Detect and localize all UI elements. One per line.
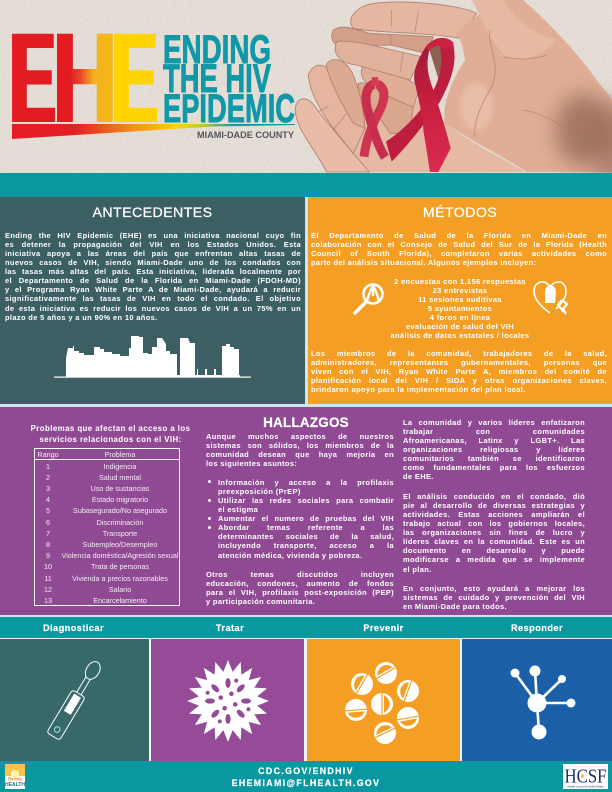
text: conclusion paragraph: sistemas de cuidado y prevención del VIH bbox=[403, 593, 585, 602]
heading: hallazgos: HALLAZGOS bbox=[263, 415, 349, 430]
text: hallazgos intro bbox=[206, 432, 394, 468]
text: hallazgos closing: y participación comunitaria. bbox=[206, 597, 315, 606]
text: metodos intro: colaboración con el Consejo de Salud del Sur de la Florida (Health bbox=[311, 240, 607, 249]
logo: florida health: florida bbox=[8, 776, 22, 782]
table rows: Encarcelamiento bbox=[93, 596, 147, 605]
icon: network bbox=[510, 666, 576, 740]
header photo bbox=[0, 0, 612, 173]
label: diagnosticar: Diagnosticar bbox=[43, 623, 104, 633]
text: hallazgos intro: los siguientes asuntos: bbox=[206, 459, 297, 468]
logo title: Ending the HIV Epidemic: ENDING bbox=[163, 28, 271, 72]
icon: test swab bbox=[47, 658, 104, 740]
table header: Problema bbox=[105, 450, 135, 459]
teal band bbox=[0, 173, 612, 197]
text: metodos intro: parte del análisis situacional. Algunos ejemplos incluyen: bbox=[311, 258, 536, 267]
list: hallazgos bullets: Información y acceso a la profilaxis bbox=[218, 478, 394, 486]
table: problems ranking bbox=[34, 448, 180, 606]
fabric background bbox=[0, 0, 612, 173]
footer contact text: CDC.GOV/ENDHIV bbox=[258, 766, 354, 776]
icon: city skyline bbox=[54, 336, 251, 378]
text: county analysis paragraph: líderes claves en la comunidad. Este es un bbox=[403, 537, 585, 546]
logo title: Ending the HIV Epidemic: EPIDEMIC bbox=[163, 87, 295, 131]
pillar label band bbox=[0, 617, 612, 792]
text: metodos closing bbox=[311, 348, 607, 394]
table rows: Violencia doméstica/Agresión sexual bbox=[62, 551, 178, 560]
text: county analysis paragraph bbox=[403, 492, 585, 574]
text: antecedentes: de esta iniciativa es reducir los nuevos casos de VIH a un 75% en un bbox=[5, 304, 301, 313]
list: hallazgos bullets: el estigma bbox=[218, 505, 258, 514]
list: metodos activities: 4 foros en línea bbox=[430, 313, 490, 322]
table rows: Trata de personas bbox=[91, 562, 149, 571]
table rows: 7 bbox=[46, 529, 50, 538]
table rows: 11 bbox=[44, 574, 52, 582]
list: hallazgos bullets: atención médica, vivienda y pobreza. bbox=[218, 551, 362, 560]
list: metodos activities: 2 encuestas con 1,156 respuestas bbox=[394, 276, 526, 286]
gradient swoosh bbox=[12, 124, 295, 139]
table heading bbox=[31, 424, 190, 444]
red ribbon large bbox=[386, 38, 455, 172]
table rows: Indigencia bbox=[104, 462, 136, 470]
text: metodos closing: Los miembros de la comunidad, trabajadores de la salud, bbox=[311, 348, 607, 358]
text: conclusion paragraph: En conjunto, esto ayudará a mejorar los bbox=[403, 584, 585, 592]
logo title: Ending the HIV Epidemic: THE HIV bbox=[163, 57, 271, 101]
county label: MIAMI-DADE COUNTY bbox=[197, 130, 295, 141]
list: metodos activities: análisis de datos estatales / locales bbox=[391, 331, 529, 340]
table rows: 2 bbox=[46, 473, 50, 482]
table rows: Salario bbox=[109, 585, 131, 594]
list: hallazgos bullets: preexposición (PrEP) bbox=[218, 487, 301, 496]
text: antecedentes bbox=[5, 230, 301, 322]
text: community paragraph: Afroamericanas, Latinx y LGBT+. Las bbox=[403, 436, 585, 445]
table rows: Uso de sustancias bbox=[91, 484, 149, 493]
table rows: 1 bbox=[46, 462, 50, 470]
EHE logo: E bbox=[10, 6, 55, 149]
list: hallazgos bullets: determinantes sociales de la salud, bbox=[218, 532, 394, 541]
text: community paragraph: como fundamentales para los esfuerzos bbox=[403, 463, 585, 472]
tile: prevenir bbox=[307, 639, 460, 761]
text: community paragraph: comunitarios también se identificaron bbox=[403, 454, 585, 463]
text: conclusion paragraph bbox=[403, 584, 585, 611]
hands holding ribbons bbox=[295, 0, 612, 190]
EHE logo: E bbox=[112, 6, 157, 149]
footer contact text: EHEMIAMI@FLHEALTH.GOV bbox=[232, 778, 380, 788]
table rows: 13 bbox=[44, 596, 52, 605]
label: prevenir: Prevenir bbox=[363, 623, 404, 633]
text: community paragraph: organizaciones religiosas y líderes bbox=[403, 445, 585, 454]
text: hallazgos closing: para el VIH, profilaxis post-exposición (PEP) bbox=[206, 588, 394, 597]
text: community paragraph bbox=[403, 418, 585, 481]
table heading: servicios relacionados con el VIH: bbox=[39, 435, 182, 444]
text: community paragraph: de EHE. bbox=[403, 472, 434, 481]
text: hallazgos intro: sistemas son sólidos, los miembros de la bbox=[206, 441, 394, 450]
icon: heart with ribbon bbox=[533, 281, 568, 315]
list: hallazgos bullets: Abordar temas referente a las bbox=[218, 523, 394, 532]
text: antecedentes: Ending the HIV Epidemic (EHE) es una iniciativa nacional cuyo fin bbox=[5, 230, 301, 240]
text: metodos intro: El Departamento de Salud de la Florida en Miami-Dade en bbox=[311, 230, 607, 240]
icon: virus bbox=[187, 660, 269, 742]
logo: florida health bbox=[5, 764, 25, 789]
label: responder: Responder bbox=[511, 623, 563, 633]
bullet markers bbox=[208, 480, 211, 529]
list: metodos activities: 11 sesiones auditivas bbox=[418, 295, 502, 304]
panel: antecedentes bbox=[0, 197, 305, 404]
panel: metodos bbox=[308, 197, 612, 404]
list: metodos activities: evaluación de salud del VIH bbox=[406, 322, 514, 331]
table rows: Transporte bbox=[103, 529, 137, 538]
right palm and thumb bbox=[444, 0, 612, 172]
table rows: 5 bbox=[46, 506, 50, 515]
table rows: 9 bbox=[46, 551, 50, 560]
label: tratar: Tratar bbox=[216, 623, 244, 633]
text: antecedentes: significativamente las tasas de VIH en todo el condado. El objetivo bbox=[5, 294, 301, 303]
footer contact text bbox=[232, 766, 380, 788]
list: metodos activities bbox=[390, 276, 529, 340]
tile: tratar bbox=[151, 639, 304, 761]
table heading: Problemas que afectan el acceso a los bbox=[31, 424, 190, 433]
table rows: 12 bbox=[44, 585, 52, 594]
text: hallazgos intro: Aunque muchos aspectos de nuestros bbox=[206, 432, 394, 440]
text: metodos closing: planificación local del VIH / SIDA y otras organizaciones claves, bbox=[311, 376, 607, 385]
text: metodos closing: brindaron apoyo para la implementación del plan local. bbox=[311, 385, 526, 394]
table rows: Estado migratorio bbox=[92, 495, 148, 504]
lower palm bbox=[353, 83, 525, 172]
pillar icons row bbox=[0, 638, 612, 761]
table rows: Vivienda a precios razonables bbox=[72, 574, 168, 582]
icon: magnifier bbox=[353, 283, 384, 315]
table rows: 8 bbox=[46, 540, 50, 549]
heading: antecedentes: ANTECEDENTES bbox=[93, 205, 212, 221]
tile: responder bbox=[462, 639, 612, 761]
list: hallazgos bullets: Utilizar las redes sociales para combatir bbox=[218, 496, 394, 505]
logo: florida health: HEALTH bbox=[5, 782, 25, 788]
text: antecedentes: es detener la propagación del VIH en los Estados Unidos. Esta bbox=[5, 240, 301, 249]
text: hallazgos closing: Otros temas discutidos incluyen bbox=[206, 570, 394, 578]
text: metodos intro bbox=[311, 230, 607, 267]
list: hallazgos bullets: Aumentar el numero de pruebas del VIH bbox=[218, 514, 394, 523]
text: county analysis paragraph: modificarse a medida que se implemente bbox=[403, 555, 585, 564]
table rows: 10 bbox=[44, 562, 52, 571]
panel: hallazgos bbox=[0, 407, 612, 615]
text: county analysis paragraph: las organizaciones sin fines de lucro y bbox=[403, 528, 585, 537]
text: hallazgos closing: educación, condones, aumento de fondos bbox=[206, 579, 394, 588]
table rows: Subempleo/Desempleo bbox=[83, 540, 157, 549]
logo title: Ending the HIV Epidemic bbox=[163, 28, 295, 131]
table rows: Salud mental bbox=[99, 473, 141, 482]
list: hallazgos bullets bbox=[218, 478, 394, 560]
text: county analysis paragraph: el plan. bbox=[403, 565, 432, 574]
icon: pills bbox=[344, 658, 422, 748]
text: county analysis paragraph: documento en desarrollo y puede bbox=[403, 546, 585, 555]
text: hallazgos closing bbox=[206, 570, 394, 606]
text: community paragraph: La comunidad y varios líderes enfatizaron bbox=[403, 418, 585, 426]
text: metodos closing: viven con el VIH, Ryan White Parte A, miembros del comité de bbox=[311, 367, 607, 376]
text: antecedentes: plazo de 5 años y a un 90% en 10 años. bbox=[5, 313, 158, 322]
text: antecedentes: el Departamento de Salud de la Florida en Miami-Dade (FDOH-MD) bbox=[5, 276, 301, 285]
text: metodos intro: Council of South Florida), completaron varias actividades como bbox=[311, 249, 607, 258]
table rows: Discriminación bbox=[97, 518, 143, 526]
text: county analysis paragraph: pie al desarrollo de diversas estrategias y bbox=[403, 501, 585, 510]
table header: Rango bbox=[37, 450, 59, 459]
list: metodos activities: 23 entrevistas bbox=[433, 286, 487, 295]
table rows: Subasegurado/No asegurado bbox=[73, 506, 167, 515]
text: antecedentes: iniciativa apoya a las áreas del país que enfrentan altas tasas de bbox=[5, 249, 301, 258]
list: hallazgos bullets: incluyendo transporte, acceso a la bbox=[218, 541, 394, 550]
red ribbon small bbox=[364, 82, 385, 157]
text: metodos closing: administradores, representantes gubernamentales, personas que bbox=[311, 358, 607, 367]
text: antecedentes: las tasas más altas del país. Esta iniciativa, liderada localmente por bbox=[5, 267, 301, 276]
list: metodos activities: 5 ayuntamientos bbox=[428, 304, 492, 313]
table rows: 6 bbox=[46, 518, 50, 526]
text: county analysis paragraph: El análisis conducido en el condado, dió bbox=[403, 492, 585, 500]
table rows: 4 bbox=[46, 495, 50, 504]
table rows: 3 bbox=[46, 484, 50, 493]
text: county analysis paragraph: trabajo actual con los gobiernos locales, bbox=[403, 519, 585, 528]
EHE logo bbox=[10, 6, 157, 150]
table header bbox=[35, 449, 179, 460]
text: hallazgos intro: comunidad desean que haya mejoría en bbox=[206, 450, 394, 459]
heading: metodos: MÉTODOS bbox=[423, 205, 497, 221]
text: antecedentes: nuevos casos de VIH, siendo Miami-Dade uno de los condados con bbox=[5, 258, 301, 267]
EHE logo: H bbox=[52, 7, 117, 150]
text: county analysis paragraph: actividades. Estas acciones ampliarán el bbox=[403, 510, 585, 519]
table rows bbox=[44, 462, 178, 605]
text: conclusion paragraph: en Miami-Dade para todos. bbox=[403, 602, 507, 611]
logo: HCSF: Health Council of South Florida bbox=[568, 784, 604, 788]
text: community paragraph: trabajar con comunidades bbox=[403, 427, 585, 436]
tile: diagnosticar bbox=[0, 639, 149, 761]
text: antecedentes: y el Programa Ryan White Parte A de Miami-Dade, ayudará a reducir bbox=[5, 285, 301, 294]
